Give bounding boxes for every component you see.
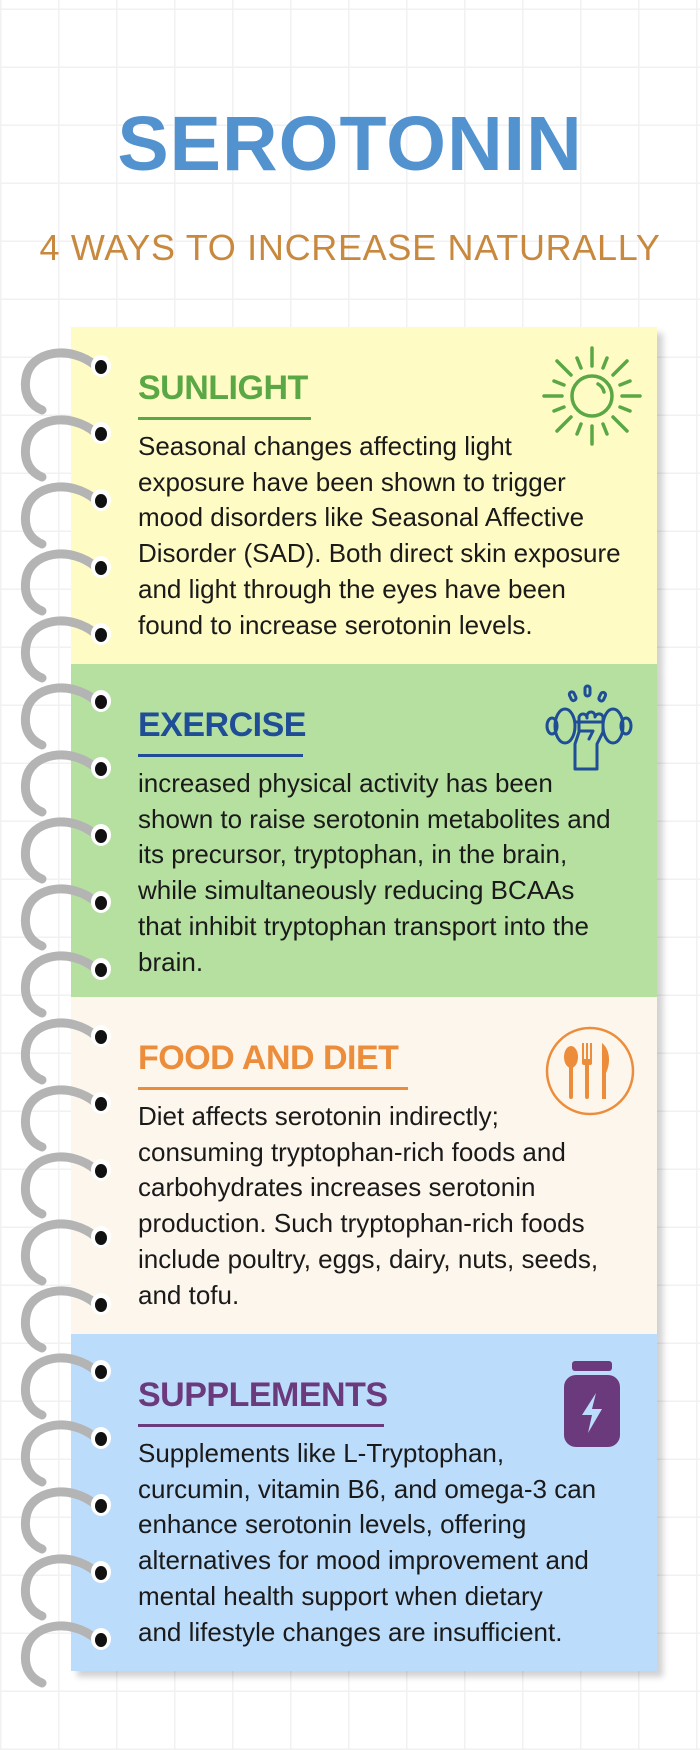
text: sunlight: Disorder (SAD). Both direct skin exposure — [138, 538, 621, 568]
icon: supplement jar — [564, 1361, 620, 1447]
text: food: consuming tryptophan-rich foods and — [138, 1137, 566, 1167]
icon: dumbbell fist — [546, 684, 632, 770]
text: food: and tofu. — [138, 1280, 239, 1310]
icon: sun — [542, 346, 642, 446]
text: sunlight: Seasonal changes affecting light — [138, 431, 512, 461]
text: supplements: mental health support when dietary — [138, 1581, 543, 1611]
text: supplements: and lifestyle changes are insufficient. — [138, 1617, 562, 1647]
panel: food and diet — [71, 997, 657, 1334]
text: supplements: Supplements like L-Tryptophan, — [138, 1438, 504, 1468]
heading: food and diet: FOOD AND DIET — [138, 1039, 398, 1077]
text: food: Diet affects serotonin indirectly; — [138, 1101, 499, 1131]
panel: exercise — [71, 664, 657, 997]
text: sunlight: mood disorders like Seasonal Affective — [138, 502, 584, 532]
heading: supplements: SUPPLEMENTS — [138, 1376, 388, 1414]
text: food: production. Such tryptophan-rich foods — [138, 1208, 585, 1238]
heading: exercise: EXERCISE — [138, 706, 306, 744]
text: food: carbohydrates increases serotonin — [138, 1172, 535, 1202]
text: exercise: its precursor, tryptophan, in the brain, — [138, 839, 567, 869]
title: SEROTONIN — [117, 101, 583, 187]
text: sunlight: found to increase serotonin levels. — [138, 610, 533, 640]
panel: sunlight — [71, 327, 657, 664]
subtitle: 4 WAYS TO INCREASE NATURALLY — [39, 227, 661, 268]
spiral binding rings — [20, 348, 111, 1688]
text: supplements: enhance serotonin levels, offering — [138, 1509, 526, 1539]
text: sunlight — [138, 431, 621, 640]
icon: utensils — [546, 1026, 634, 1116]
text: sunlight: exposure have been shown to trigger — [138, 467, 566, 497]
text: exercise: while simultaneously reducing BCAAs — [138, 875, 574, 905]
text: supplements: alternatives for mood improvement and — [138, 1545, 589, 1575]
text: food: include poultry, eggs, dairy, nuts, seeds, — [138, 1244, 598, 1274]
panel: supplements — [71, 1334, 657, 1671]
text: exercise: that inhibit tryptophan transport into the — [138, 911, 589, 941]
text: supplements — [138, 1438, 596, 1647]
heading: sunlight: SUNLIGHT — [138, 369, 308, 407]
text: sunlight: and light through the eyes have been — [138, 574, 566, 604]
text: food — [138, 1101, 598, 1310]
text: supplements: curcumin, vitamin B6, and omega-3 can — [138, 1474, 596, 1504]
text: exercise — [138, 768, 611, 977]
text: exercise: brain. — [138, 947, 203, 977]
text: exercise: increased physical activity has been — [138, 768, 553, 798]
text: exercise: shown to raise serotonin metabolites and — [138, 804, 611, 834]
